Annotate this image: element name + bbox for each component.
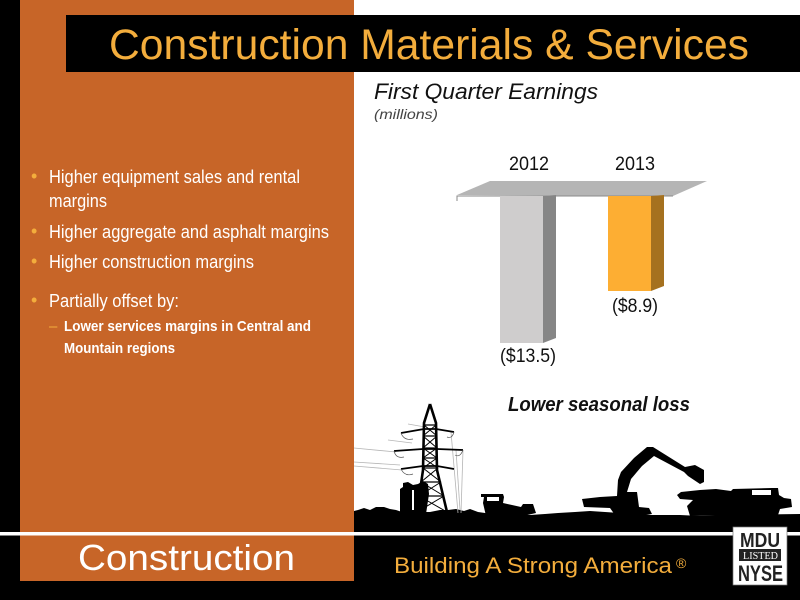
value: 2013: ($8.9) [612, 296, 658, 317]
bullet: aggregate: Higher aggregate and asphalt margins [49, 222, 329, 242]
logo: MDU listed NYSE: NYSE [738, 561, 783, 586]
bullet: partially offset: Partially offset by: [49, 291, 179, 311]
value: 2012: ($13.5) [500, 346, 556, 367]
construction silhouette [354, 404, 800, 532]
chart heading: First Quarter Earnings [374, 79, 598, 104]
icon: dump truck [677, 488, 792, 516]
bar: 2013 [608, 195, 664, 291]
panel: white content area [354, 0, 800, 532]
logo: MDU listed NYSE: MDU [740, 530, 780, 552]
bullet: construction: • [31, 251, 37, 271]
bar: 2012 [500, 195, 556, 343]
logo: MDU listed NYSE [733, 527, 787, 586]
icon: excavator [582, 447, 704, 516]
tagline: Building A Strong America [394, 553, 673, 578]
chart heading [374, 79, 598, 122]
bullet: equipment [31, 166, 300, 211]
callout: lower seasonal loss: Lower seasonal loss [508, 394, 690, 416]
sub-bullet: services margins: Mountain regions [64, 340, 175, 357]
bullet: equipment: • [31, 166, 37, 186]
label: 2012: 2012 [509, 154, 549, 175]
ground [354, 507, 800, 532]
bullet list [31, 166, 329, 357]
footer panel: construction label [20, 536, 354, 581]
sub-bullet: services margins [49, 318, 311, 357]
icon: workers [400, 481, 429, 514]
icon: bulldozer [481, 494, 536, 516]
power lines [354, 424, 463, 513]
bullet: aggregate: • [31, 221, 37, 241]
icon: transmission tower [394, 404, 463, 512]
bullet: construction: Higher construction margins [49, 252, 254, 272]
sub-bullet: services margins: Lower services margins in Central and [64, 318, 311, 335]
tagline: ® [676, 555, 687, 571]
chart floor [457, 181, 707, 201]
chart heading: (millions) [374, 106, 438, 122]
sub-bullet: services margins: – [49, 318, 58, 335]
bullet: partially offset: • [31, 290, 37, 310]
footer panel: construction label: Construction [78, 537, 295, 578]
bar chart [457, 154, 707, 367]
footer white rule [0, 532, 800, 536]
title banner: Construction Materials & Services [109, 21, 749, 69]
logo: MDU listed NYSE: LISTED [743, 551, 778, 562]
panel: orange sidebar [20, 0, 354, 532]
bullet: equipment: margins [49, 191, 107, 211]
label: 2013: 2013 [615, 154, 655, 175]
bullet: equipment: Higher equipment sales and rental [49, 167, 300, 187]
